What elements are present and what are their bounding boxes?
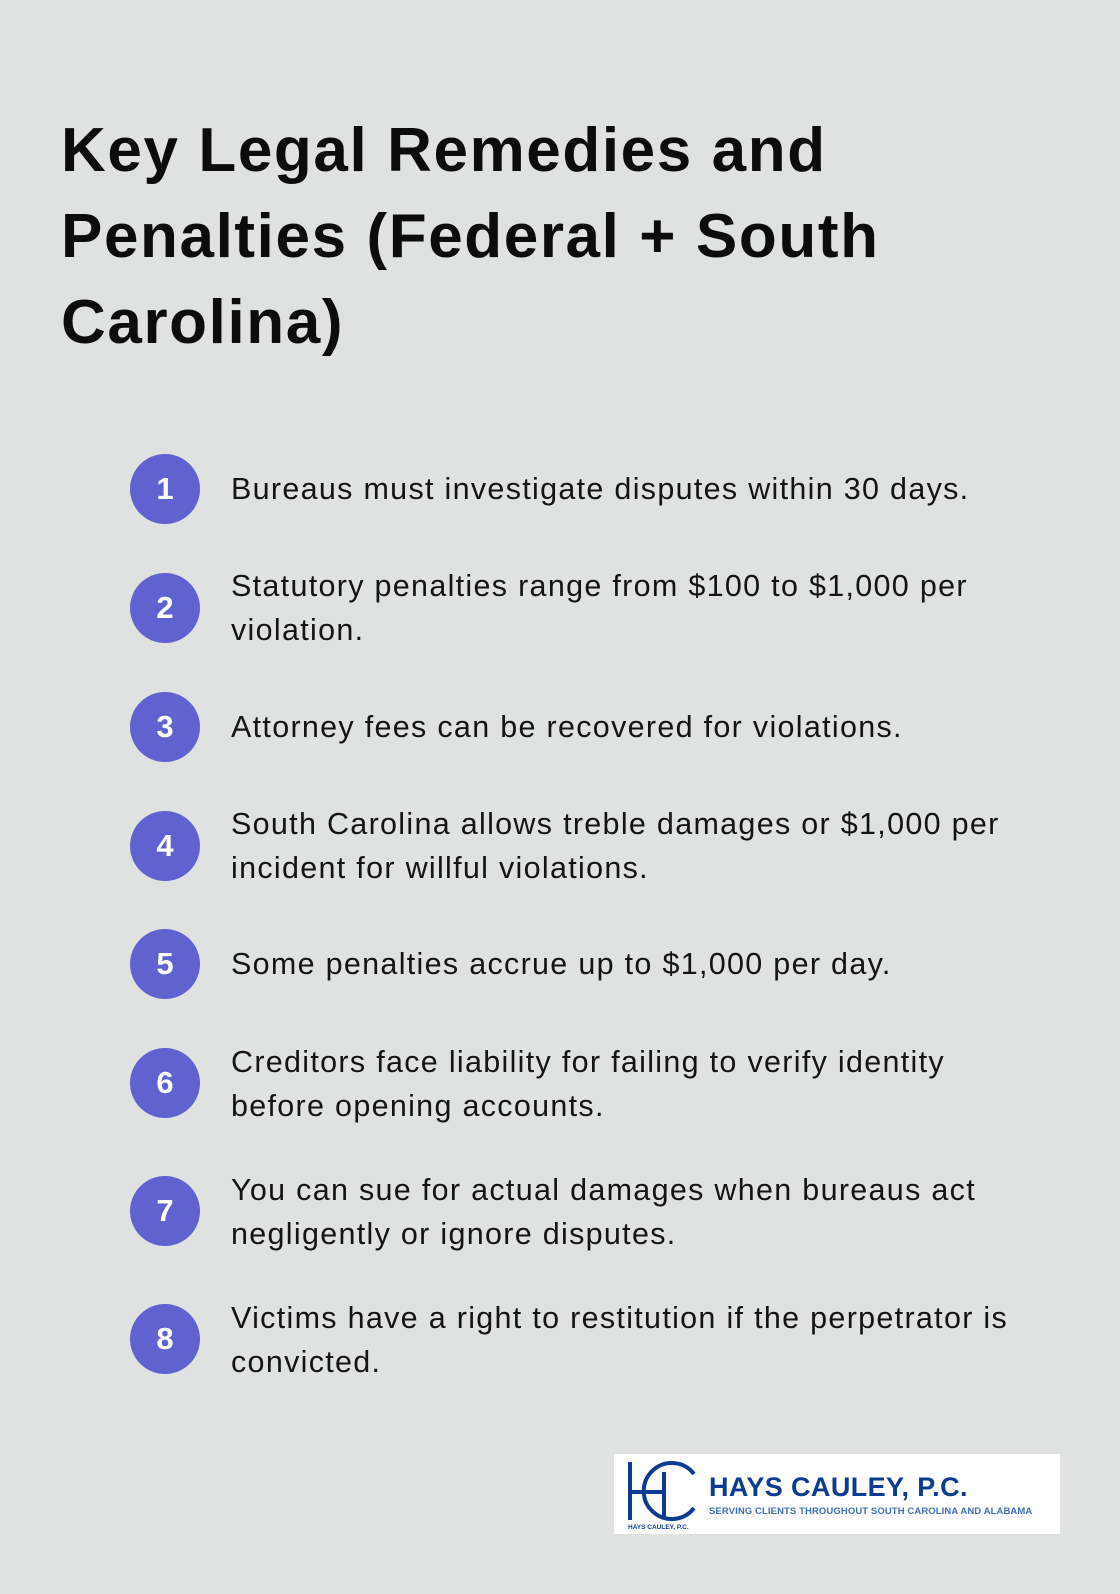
- text: 2: [156, 590, 174, 625]
- text: 1: [156, 471, 174, 506]
- text: convicted.: [231, 1345, 381, 1379]
- text: 3: [156, 709, 174, 744]
- logo: HAYS CAULEY, P.C.: [709, 1472, 968, 1502]
- text: 7: [156, 1193, 174, 1228]
- logo: HAYS CAULEY, P.C.: [628, 1524, 689, 1531]
- text: South Carolina allows treble damages or $1,000 per: [231, 807, 1000, 841]
- text: before opening accounts.: [231, 1089, 605, 1123]
- title: Penalties (Federal + South: [61, 202, 880, 271]
- text: You can sue for actual damages when bureaus act: [231, 1173, 976, 1207]
- item 2: [130, 569, 968, 647]
- item 7: [130, 1173, 976, 1251]
- text: incident for willful violations.: [231, 851, 649, 885]
- text: Attorney fees can be recovered for violations.: [231, 710, 903, 744]
- text: 5: [156, 946, 174, 981]
- text: Bureaus must investigate disputes within 30 days.: [231, 472, 969, 506]
- item 5: [130, 929, 892, 999]
- logo: [614, 1454, 1060, 1534]
- text: Statutory penalties range from $100 to $1,000 per: [231, 569, 968, 603]
- text: Creditors face liability for failing to verify identity: [231, 1045, 945, 1079]
- item 8: [130, 1301, 1008, 1379]
- logo: SERVING CLIENTS THROUGHOUT SOUTH CAROLINA AND ALABAMA: [709, 1506, 1032, 1517]
- title: [61, 116, 880, 357]
- item 1: [130, 454, 969, 524]
- item 4: [130, 807, 1000, 885]
- text: violation.: [231, 613, 364, 647]
- text: negligently or ignore disputes.: [231, 1217, 677, 1251]
- title: Key Legal Remedies and: [61, 116, 827, 185]
- item 6: [130, 1045, 945, 1123]
- item 3: [130, 692, 903, 762]
- title: Carolina): [61, 288, 344, 357]
- text: 8: [156, 1321, 174, 1356]
- icon: HC monogram: [628, 1461, 696, 1521]
- text: 6: [156, 1065, 174, 1100]
- text: Victims have a right to restitution if the perpetrator is: [231, 1301, 1008, 1335]
- text: Some penalties accrue up to $1,000 per day.: [231, 947, 892, 981]
- text: 4: [156, 828, 174, 863]
